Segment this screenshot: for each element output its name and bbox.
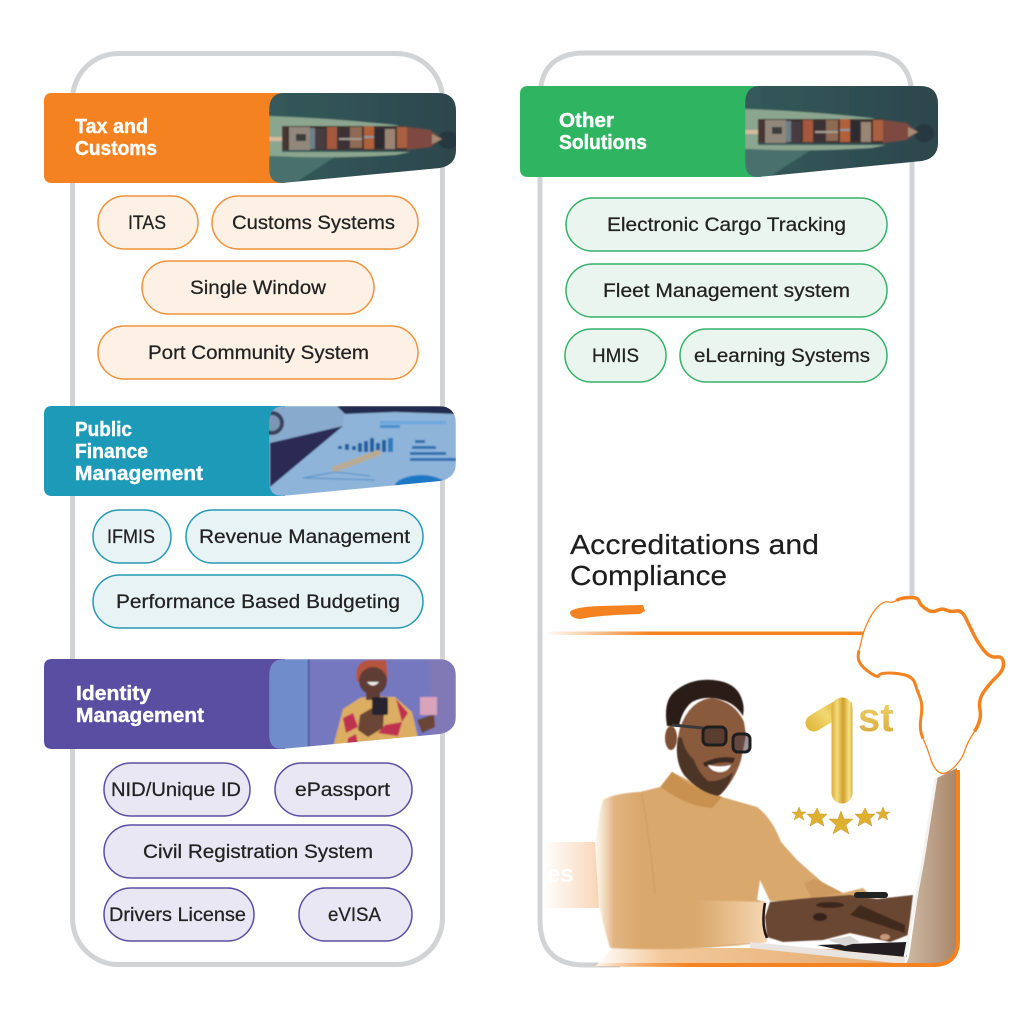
heading: Accreditations and Compliance [570,529,819,591]
banner: Other Solutions [520,86,938,177]
pills: Other Solutions [565,198,887,382]
banner: Identity Management: Management [76,705,204,727]
faded peach tab: es [547,861,574,888]
pills: Other Solutions: eLearning Systems [694,345,870,367]
banner: Tax and Customs: Tax and [75,116,148,138]
pills: Tax and Customs: ITAS [128,212,166,234]
pills: Identity Management: Drivers License [109,904,246,926]
pills: Public Finance Management [93,510,423,628]
banner: Public Finance Management: Management [75,463,203,485]
pills: Tax and Customs [98,196,418,379]
heading: Accreditations and Compliance: Accreditations and [570,529,819,560]
badge: gold 1st [806,698,894,804]
banner: Other Solutions: Other [559,110,614,132]
stars rating [792,807,890,834]
pills: Tax and Customs: Customs Systems [232,212,395,234]
heading: Accreditations and Compliance: Compliance [570,560,727,591]
banner: Identity Management [44,659,456,749]
pills: Identity Management: Civil Registration System [143,841,373,863]
banner: Other Solutions: Solutions [559,132,647,154]
badge: gold 1st: st [858,696,894,740]
pills: Other Solutions: Electronic Cargo Tracking [607,214,846,236]
banner: Tax and Customs: Customs [75,138,157,160]
banner: Public Finance Management: Finance [75,441,148,463]
pills: Identity Management [104,763,412,941]
orange rule [545,632,865,635]
pills: Public Finance Management: Revenue Management [199,526,411,548]
pills: Other Solutions: Fleet Management system [603,280,850,302]
banner: Public Finance Management: Public [75,419,132,441]
banner: Identity Management: Identity [76,683,152,705]
orange photo edge [590,770,958,965]
photo: man at laptop [593,680,957,967]
banner: Public Finance Management [44,406,456,501]
panel: left frame [72,54,442,964]
pills: Identity Management: NID/Unique ID [111,779,241,801]
pills: Tax and Customs: Port Community System [148,342,369,364]
pills: Identity Management: ePassport [295,779,391,801]
pills: Tax and Customs: Single Window [190,277,327,299]
badge: gold 1st: 1 [799,671,880,834]
heading underline brush stroke [570,605,645,619]
pills: Identity Management: eVISA [328,904,381,926]
pills: Public Finance Management: IFMIS [107,526,155,548]
panel: right frame [540,53,912,965]
faded peach tab [543,842,599,908]
pills: Other Solutions: HMIS [592,345,639,367]
pills: Public Finance Management: Performance Based Budgeting [116,591,400,613]
map: Africa outline [858,597,1004,773]
banner: Tax and Customs [44,93,456,183]
